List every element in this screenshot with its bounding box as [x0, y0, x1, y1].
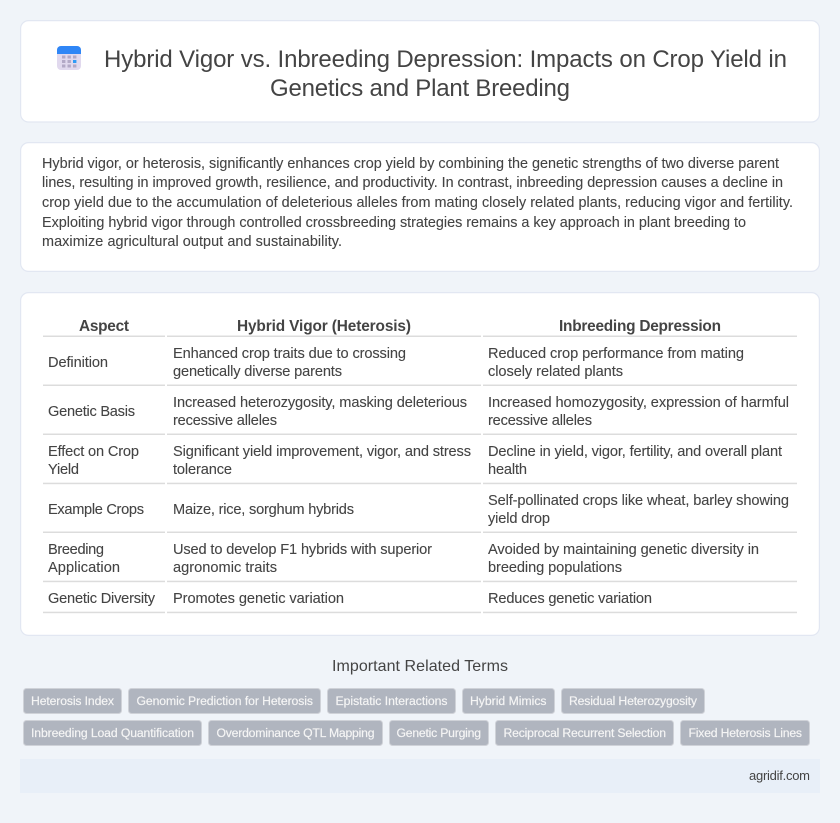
- row: genetic basis: Increased heterozygosity, masking deleterious: [173, 395, 467, 411]
- row: definition: Definition: [48, 355, 108, 371]
- row: example crops: yield drop: [488, 511, 550, 527]
- tag: epistatic interactions: Epistatic Interactions: [336, 694, 448, 708]
- row: genetic basis: Genetic Basis: [48, 404, 135, 420]
- table header row: Aspect: [79, 318, 129, 335]
- intro text block: maximize agricultural output and sustainability.: [42, 234, 342, 250]
- row: effect on crop yield: Significant yield improvement, vigor, and stress: [173, 444, 471, 460]
- heading: important related terms: Important Related Terms: [332, 658, 508, 675]
- panel: header: [21, 21, 819, 122]
- row: breeding application: Breeding: [48, 542, 104, 558]
- row: breeding application: agronomic traits: [173, 560, 277, 576]
- tag: fixed heterosis lines: Fixed Heterosis Lines: [688, 726, 802, 740]
- tag: genomic prediction: Genomic Prediction for Heterosis: [136, 694, 313, 708]
- icon: calendar: [57, 46, 81, 70]
- row: definition: closely related plants: [488, 364, 623, 380]
- tag: hybrid mimics: [462, 688, 554, 714]
- row: genetic basis: recessive alleles: [488, 413, 592, 429]
- tag: heterosis index: [24, 688, 122, 714]
- tag: genetic purging: [390, 720, 488, 746]
- intro text block: [42, 156, 793, 250]
- panel: introduction: [21, 143, 819, 271]
- tag: epistatic interactions: [328, 688, 456, 714]
- row: breeding application: Avoided by maintaining genetic diversity in: [488, 542, 759, 558]
- tag: heterosis index: Heterosis Index: [31, 694, 114, 708]
- tag: overdominance: [208, 720, 382, 746]
- row: definition: Reduced crop performance from mating: [488, 346, 744, 362]
- title: Hybrid Vigor vs. Inbreeding Depression: Impacts on Crop Yield in: [104, 46, 787, 73]
- row: genetic basis: Increased homozygosity, expression of harmful: [488, 395, 789, 411]
- row: genetic basis: [48, 395, 789, 429]
- table header row: Inbreeding Depression: [559, 318, 721, 335]
- title: Genetics and Plant Breeding: [270, 75, 570, 102]
- row: definition: genetically diverse parents: [173, 364, 342, 380]
- tag: genomic prediction: [128, 688, 320, 714]
- row: genetic diversity: Genetic Diversity: [48, 591, 156, 607]
- row: effect on crop yield: tolerance: [173, 462, 232, 478]
- tag: inbreeding load: [24, 720, 202, 746]
- intro text block: lines, resulting in improved growth, resilience, and productivity. In contrast, inbreeding depression causes a decline in: [42, 175, 783, 191]
- tag: residual heterozygosity: Residual Heterozygosity: [569, 694, 698, 708]
- tag: reciprocal recurrent selection: [496, 720, 674, 746]
- row: definition: [48, 346, 744, 380]
- row: genetic diversity: Reduces genetic variation: [488, 591, 652, 607]
- tag: overdominance: Overdominance QTL Mapping: [216, 726, 374, 740]
- row: effect on crop yield: Effect on Crop: [48, 444, 139, 460]
- row: genetic diversity: [48, 591, 652, 607]
- row: genetic diversity: Promotes genetic variation: [173, 591, 344, 607]
- title: [104, 46, 787, 102]
- row: effect on crop yield: health: [488, 462, 527, 478]
- tag: fixed heterosis lines: [680, 720, 810, 746]
- intro text block: Exploiting hybrid vigor through controlled crossbreeding strategies remains a key approach in plant breeding to: [42, 215, 746, 231]
- table header row: Hybrid Vigor (Heterosis): [237, 318, 411, 335]
- row: definition: Enhanced crop traits due to crossing: [173, 346, 406, 362]
- panel: comparison table: [21, 293, 819, 635]
- row: example crops: Example Crops: [48, 502, 144, 518]
- row: effect on crop yield: [48, 444, 782, 478]
- row: effect on crop yield: Yield: [48, 462, 79, 478]
- tag: hybrid mimics: Hybrid Mimics: [470, 694, 546, 708]
- table header row: [79, 318, 721, 335]
- tag: residual heterozygosity: [562, 688, 704, 714]
- tag: reciprocal recurrent selection: Reciprocal Recurrent Selection: [504, 726, 666, 740]
- row: breeding application: [48, 542, 759, 576]
- row: example crops: [48, 493, 789, 527]
- row: genetic basis: recessive alleles: [173, 413, 277, 429]
- tag: inbreeding load: Inbreeding Load Quantification: [31, 726, 194, 740]
- related term tags: [24, 688, 810, 746]
- intro text block: Hybrid vigor, or heterosis, significantly enhances crop yield by combining the genetic strengths of two diverse parent: [42, 156, 779, 172]
- tag: genetic purging: Genetic Purging: [396, 726, 481, 740]
- row: breeding application: breeding populations: [488, 560, 622, 576]
- row: breeding application: Used to develop F1 hybrids with superior: [173, 542, 432, 558]
- footer: [20, 759, 820, 793]
- row: effect on crop yield: Decline in yield, vigor, fertility, and overall plant: [488, 444, 782, 460]
- row: example crops: Self-pollinated crops like wheat, barley showing: [488, 493, 789, 509]
- intro text block: crop yield due to the accumulation of deleterious alleles from mating closely related plants, reducing vigor and fertility.: [42, 195, 793, 211]
- row: breeding application: Application: [48, 560, 120, 576]
- footer: agridif.com: [749, 768, 810, 783]
- row: example crops: Maize, rice, sorghum hybrids: [173, 502, 354, 518]
